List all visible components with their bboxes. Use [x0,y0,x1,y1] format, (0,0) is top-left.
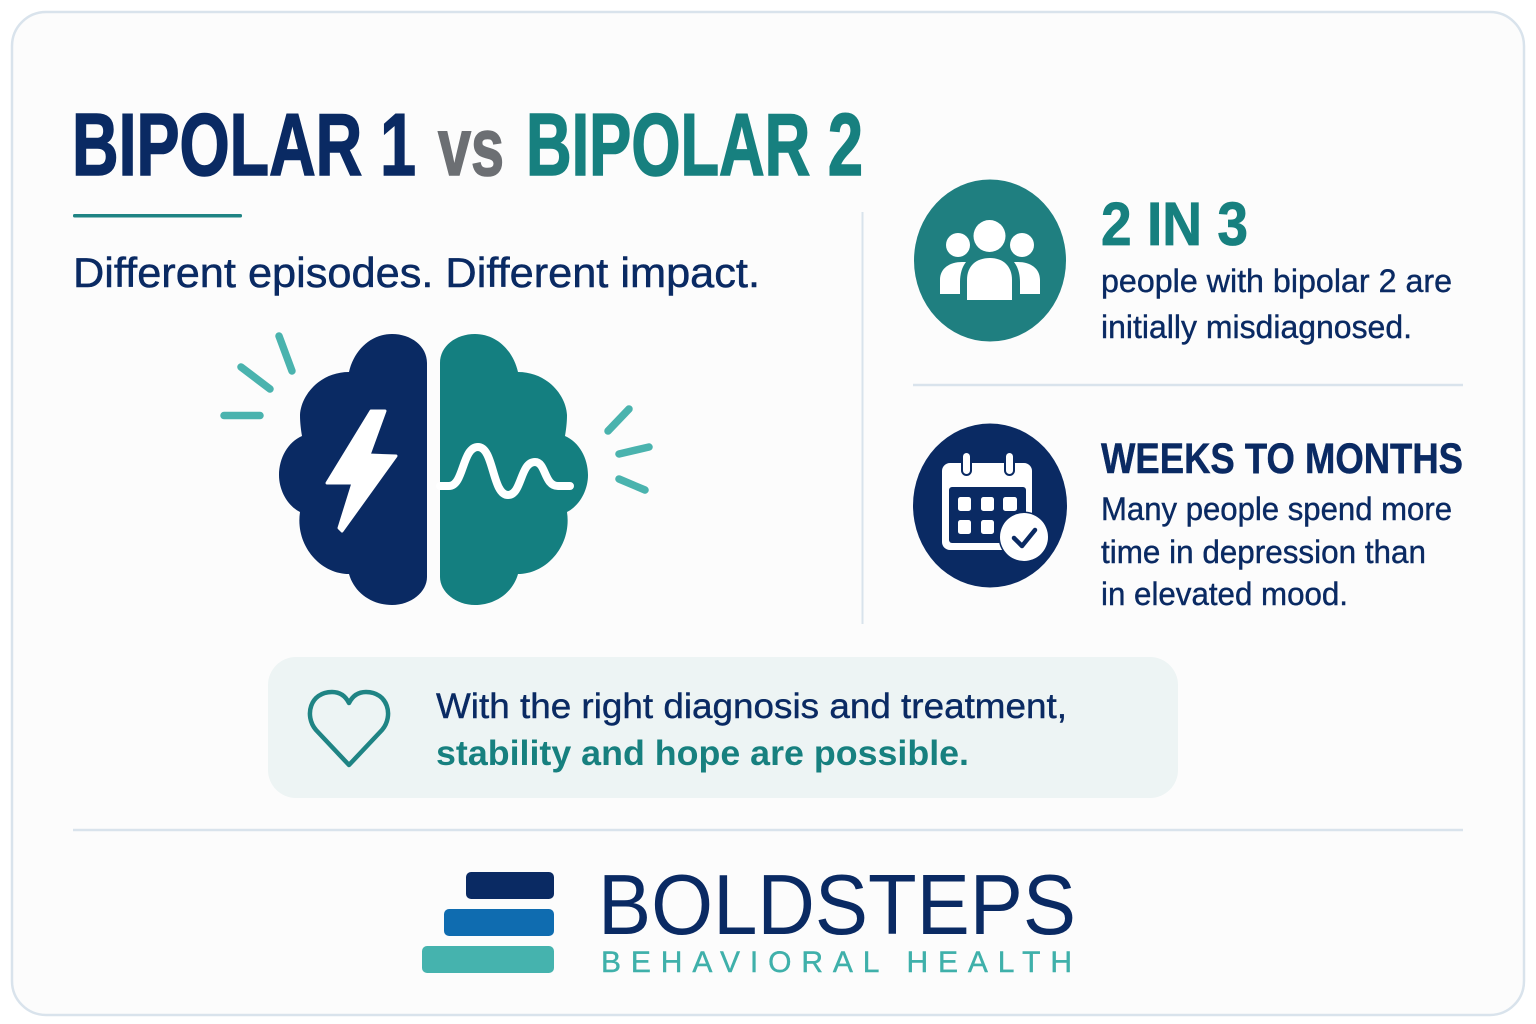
subtitle: Different episodes. Different impact. [73,249,760,296]
icon: split brain [224,334,649,605]
lightning bolt [327,411,396,531]
title: vs [438,102,504,193]
footer divider [73,829,1463,831]
stat description: people with bipolar 2 are [1101,263,1452,299]
logo wordmark: BOLDSTEPS [598,858,1076,953]
stat: 2 in 3 [914,180,1452,345]
icon: calendar [913,424,1067,588]
stat description: initially misdiagnosed. [1101,309,1412,345]
stat: weeks to months [913,424,1463,612]
icon: people [914,180,1066,342]
stat description: Many people spend more [1101,491,1452,527]
title underline [73,214,242,218]
logo mark: steps [422,872,554,973]
callout background [268,657,1178,798]
logo [422,858,1076,979]
title [72,95,863,194]
stat heading: WEEKS TO MONTHS [1101,435,1463,483]
left hemisphere [279,334,427,605]
right hemisphere [440,334,588,605]
stat description: time in depression than [1101,534,1426,570]
stat description [1101,263,1452,345]
mood wave [440,447,570,495]
icon: heart [310,692,388,765]
stat description [1101,491,1452,612]
title: BIPOLAR 1 [72,95,416,194]
radiating rays [224,336,649,490]
callout [268,657,1178,798]
logo tagline: BEHAVIORAL HEALTH [601,946,1072,979]
stat description: in elevated mood. [1101,576,1348,612]
callout text: With the right diagnosis and treatment, [436,687,1067,726]
horizontal divider [913,384,1463,386]
stat heading: 2 IN 3 [1101,190,1248,258]
vertical divider [862,212,864,624]
title: BIPOLAR 2 [526,95,863,194]
callout text [436,687,1067,773]
callout text: stability and hope are possible. [436,734,969,773]
